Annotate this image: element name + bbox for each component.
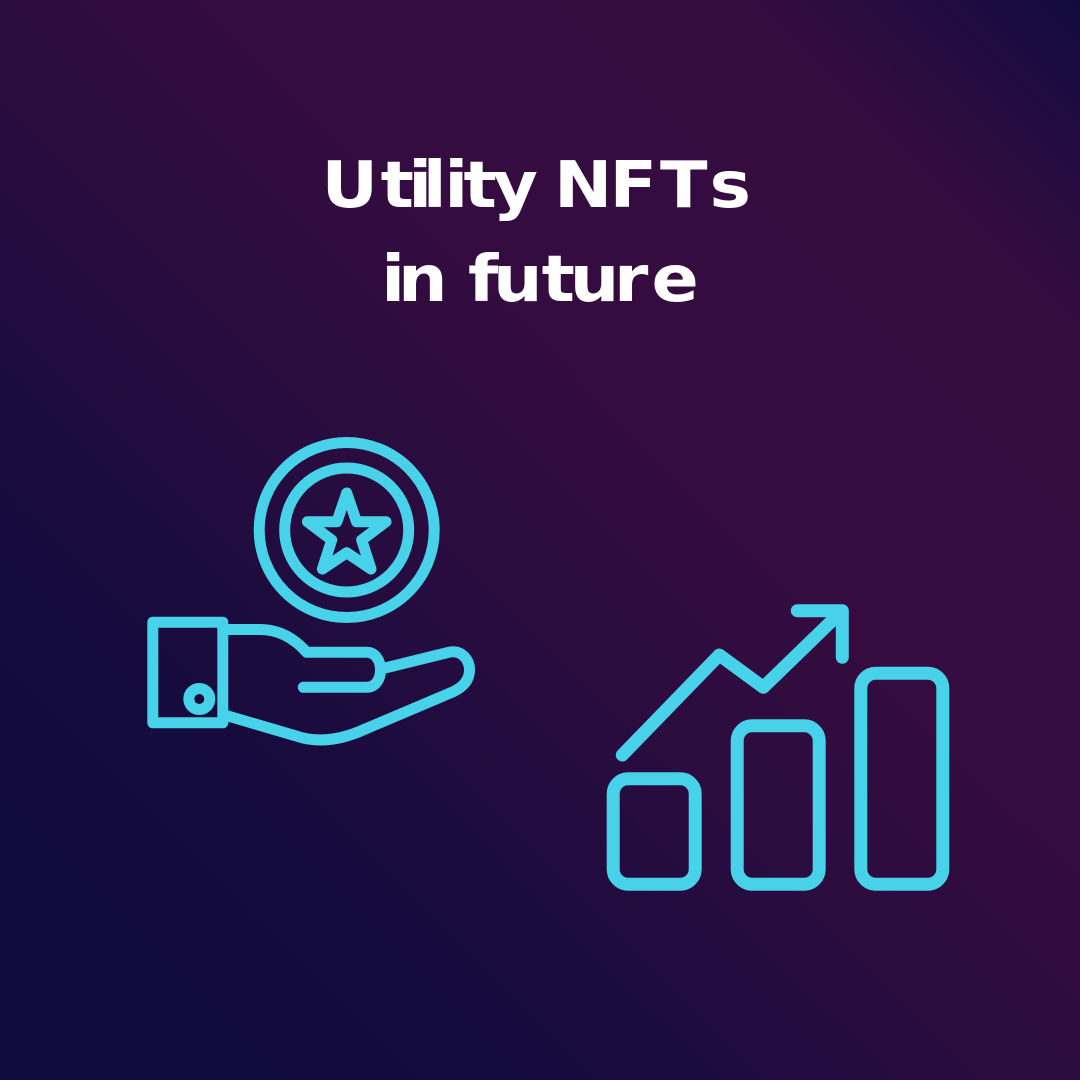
star <box>307 493 386 569</box>
title <box>322 147 751 316</box>
bar 1 <box>613 779 695 884</box>
icon: hand holding star coin <box>153 442 470 740</box>
title: in future <box>381 241 699 316</box>
trend line <box>622 612 841 755</box>
arrow head <box>797 611 842 657</box>
icon: growth bar chart <box>613 611 943 884</box>
bar 3 <box>861 673 943 884</box>
coin outer ring <box>259 442 434 618</box>
cuff button <box>189 688 210 710</box>
coin inner ring <box>285 468 409 592</box>
hand fingers and lower edge <box>228 652 470 740</box>
title: Utility NFTs <box>322 147 751 222</box>
hand thumb and palm <box>228 630 380 687</box>
cuff <box>153 622 223 723</box>
bar 2 <box>737 726 819 884</box>
